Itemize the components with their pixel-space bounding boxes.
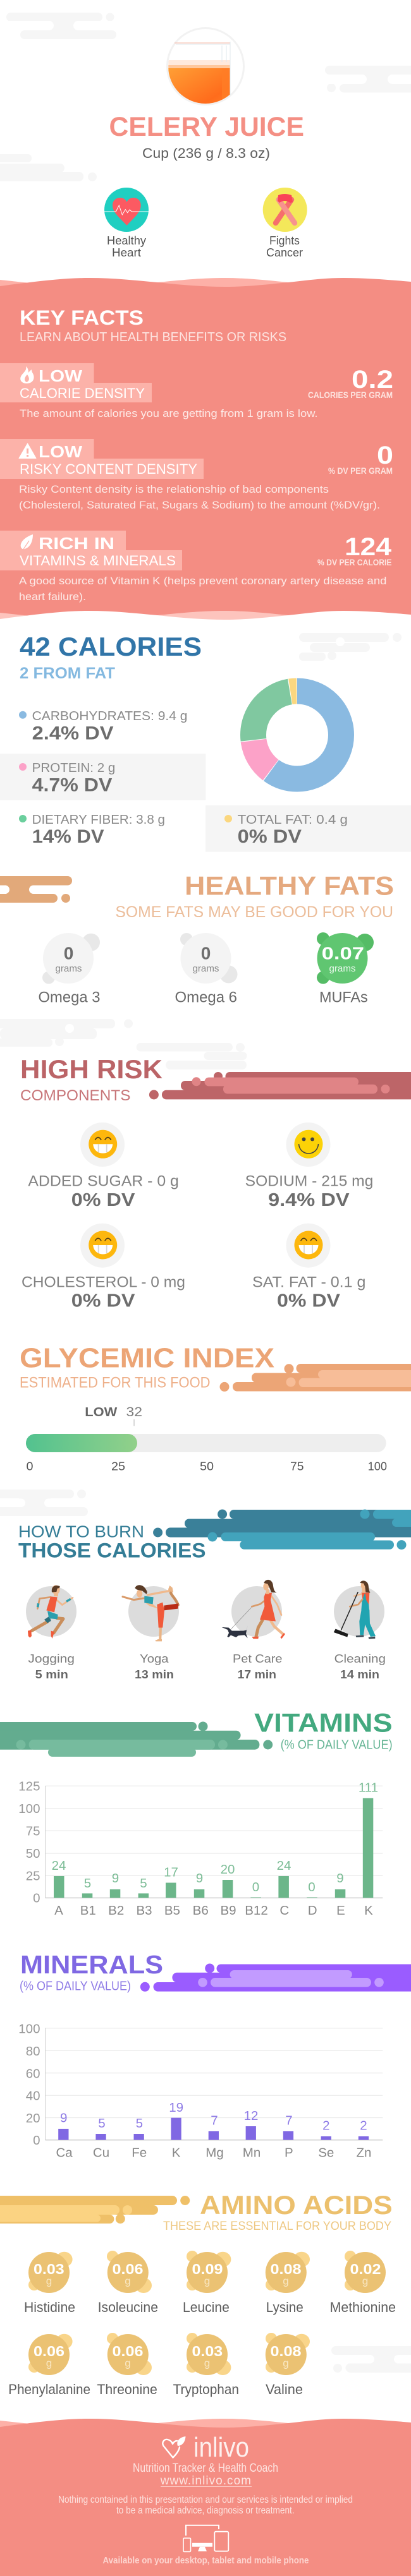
availability note: Available on your desktop, tablet and mobile phone	[102, 2555, 309, 2566]
disclaimer: Nothing contained in this presentation and our services is intended or implied	[58, 2495, 353, 2505]
chart: vitamins bar chart: 9	[336, 1871, 344, 1886]
amino: threonine: 0.06	[113, 2343, 143, 2359]
amino: tryptophan	[173, 2333, 239, 2397]
subheading: components: COMPONENTS	[20, 1087, 130, 1104]
activity: yoga	[123, 1585, 179, 1681]
chart: minerals bar chart: 12	[244, 2109, 258, 2123]
chart: vitamins bar chart: 5	[140, 1876, 147, 1891]
fact: risky content density: % DV PER GRAM	[328, 466, 393, 476]
chart: vitamins bar chart: 24	[52, 1858, 66, 1873]
chart: vitamins bar chart: 5	[84, 1876, 91, 1891]
fact: risky content density: Risky Content density is the relationship of bad components	[19, 483, 329, 495]
heading: those calories: THOSE CALORIES	[18, 1539, 206, 1562]
chart: minerals bar chart: Fe	[132, 2146, 147, 2160]
chart: vitamins bar chart: 0	[252, 1880, 259, 1894]
amino: lysine: Lysine	[266, 2299, 304, 2315]
amino: valine	[266, 2333, 310, 2397]
banner: healthy fats	[0, 876, 80, 903]
chart: vitamins bar chart: 0	[308, 1880, 316, 1894]
chart: vitamins bar chart: 9	[196, 1871, 203, 1886]
fact: calorie density: CALORIES PER GRAM	[308, 390, 393, 400]
activity: yoga: 13 min	[135, 1668, 174, 1681]
chart: vitamins bar chart: 17	[164, 1865, 178, 1880]
fact: risky content density	[0, 439, 393, 511]
amino: tryptophan: 0.03	[192, 2343, 223, 2359]
subheading: key facts: LEARN ABOUT HEALTH BENEFITS OR RISKS	[20, 330, 286, 344]
heading: calories: 42 CALORIES	[20, 632, 202, 661]
legend: dietary fiber: DIETARY FIBER: 3.8 g	[32, 813, 165, 827]
amino: lysine	[266, 2252, 310, 2315]
chart: minerals bar chart: 7	[211, 2114, 218, 2128]
chart: minerals bar chart: 19	[169, 2100, 183, 2115]
amino: phenylalanine	[8, 2334, 90, 2397]
heading: vitamins: VITAMINS	[254, 1708, 393, 1738]
amino: leucine: 0.09	[192, 2261, 223, 2277]
icon: inlivo logo: inlivo	[193, 2432, 249, 2463]
chart: glycemic index gauge: 100	[368, 1460, 387, 1473]
panel: footer	[0, 2419, 411, 2576]
chart: vitamins bar chart: 24	[277, 1858, 291, 1873]
risk: added sugar: 0% DV	[71, 1190, 135, 1210]
amino: valine: 0.08	[271, 2343, 302, 2359]
activity: pet care	[222, 1580, 285, 1681]
amino: tryptophan: g	[204, 2357, 210, 2369]
amino: threonine: g	[125, 2357, 131, 2369]
icon: devices	[183, 2525, 228, 2552]
subheading: from fat: 2 FROM FAT	[20, 665, 115, 682]
chart: vitamins bar chart: 25	[26, 1869, 40, 1883]
chart: vitamins bar chart: 0	[33, 1891, 40, 1905]
heading: key facts: KEY FACTS	[20, 306, 144, 329]
background cloud calories	[299, 633, 402, 661]
chart: minerals bar chart: 2	[322, 2119, 330, 2133]
fat: omega 6	[175, 933, 238, 1006]
subheading: healthy fats: SOME FATS MAY BE GOOD FOR YOU	[115, 903, 393, 921]
subheading: glycemic index: ESTIMATED FOR THIS FOOD	[20, 1375, 210, 1392]
subheading: minerals: (% OF DAILY VALUE)	[20, 1980, 131, 1994]
legend: carbohydrates	[19, 709, 187, 743]
website link: www.inlivo.com	[160, 2474, 251, 2488]
fat: MUFAs	[317, 932, 374, 1006]
amino: leucine: Leucine	[183, 2299, 230, 2315]
chart: minerals bar chart: 2	[360, 2119, 367, 2133]
chart: minerals bar chart: P	[285, 2146, 293, 2160]
disclaimer: to be a medical advice, diagnosis or treatment.	[116, 2505, 295, 2516]
heading: amino acids: AMINO ACIDS	[200, 2190, 393, 2220]
amino: threonine	[97, 2333, 157, 2397]
chart: minerals bar chart: 0	[33, 2133, 40, 2148]
fat: MUFAs: grams	[329, 963, 355, 974]
legend: protein	[0, 754, 206, 800]
fact: risky content density: LOW	[39, 442, 83, 461]
risk: cholesterol	[21, 1224, 185, 1311]
chart: vitamins bar chart: 20	[221, 1862, 235, 1877]
benefit: healthy heart: Healthy	[107, 234, 146, 247]
heading: glycemic index: GLYCEMIC INDEX	[20, 1343, 274, 1374]
chart: glycemic index gauge: 25	[111, 1460, 125, 1473]
fat: omega 3: 0	[64, 944, 73, 963]
background cloud high risk	[137, 1043, 247, 1069]
amino: histidine: Histidine	[24, 2299, 75, 2315]
title: CELERY JUICE	[109, 112, 304, 142]
chart: vitamins bar chart	[18, 1779, 383, 1918]
background cloud below fats	[0, 1019, 133, 1047]
legend: carbohydrates: 2.4% DV	[32, 723, 114, 743]
fact: calorie density	[0, 363, 393, 419]
chart: glycemic index gauge: 32	[126, 1405, 142, 1419]
amino: isoleucine: 0.06	[113, 2261, 143, 2277]
banner: minerals	[140, 1963, 411, 1992]
chart: minerals bar chart: 5	[98, 2116, 106, 2131]
fact: rich in vitamins and minerals: RICH IN	[39, 534, 114, 553]
chart: vitamins bar chart: E	[336, 1903, 345, 1918]
fat: omega 3	[38, 933, 100, 1006]
activity: cleaning	[334, 1580, 386, 1681]
chart: minerals bar chart: 5	[136, 2116, 143, 2131]
fat: omega 6: 0	[201, 944, 211, 963]
activity: jogging: Jogging	[28, 1652, 75, 1665]
chart: vitamins bar chart: K	[364, 1903, 373, 1918]
risk: saturated fat	[252, 1224, 365, 1311]
activity: cleaning: 14 min	[340, 1668, 379, 1681]
tagline: Nutrition Tracker & Health Coach	[133, 2462, 278, 2475]
benefit: fights cancer: Cancer	[266, 246, 303, 259]
chart: vitamins bar chart: 9	[112, 1871, 119, 1886]
activity: pet care: 17 min	[238, 1668, 276, 1681]
fact: rich in vitamins and minerals: A good source of Vitamin K (helps prevent coronary artery disease and	[19, 575, 387, 587]
amino: isoleucine: g	[125, 2275, 131, 2287]
chart: macronutrient donut	[253, 691, 341, 779]
fact: rich in vitamins and minerals: % DV PER CALORIE	[317, 558, 392, 567]
risk: cholesterol: CHOLESTEROL - 0 mg	[21, 1273, 185, 1291]
chart: vitamins bar chart: B3	[136, 1903, 152, 1918]
amino: threonine: Threonine	[97, 2381, 157, 2397]
serving size: Cup (236 g / 8.3 oz)	[142, 145, 270, 161]
chart: vitamins bar chart: 75	[26, 1824, 40, 1838]
fact: calorie density: 0.2	[352, 366, 393, 394]
activity: pet care: Pet Care	[233, 1652, 282, 1665]
disclaimer	[58, 2495, 353, 2516]
chart: vitamins bar chart: 50	[26, 1846, 40, 1861]
chart: vitamins bar chart: B5	[164, 1903, 180, 1918]
chart: minerals bar chart: 60	[26, 2066, 40, 2081]
activity: jogging: 5 min	[35, 1668, 68, 1681]
fact: risky content density: (Cholesterol, Saturated Fat, Sugars & Sodium) to the amount (%DV/gr).	[19, 499, 380, 511]
chart: vitamins bar chart: B6	[193, 1903, 209, 1918]
background cloud top left	[0, 13, 137, 39]
panel: key facts	[0, 278, 411, 629]
benefit: fights cancer	[263, 188, 307, 259]
chart: vitamins bar chart: D	[308, 1903, 317, 1918]
chart: minerals bar chart: Cu	[93, 2146, 109, 2160]
legend: carbohydrates: CARBOHYDRATES: 9.4 g	[32, 709, 187, 723]
chart: glycemic index gauge: 0	[27, 1460, 33, 1473]
fat: omega 3: Omega 3	[38, 989, 100, 1006]
fact: calorie density: LOW	[39, 366, 83, 385]
fat: MUFAs: MUFAs	[319, 989, 368, 1006]
chart: glycemic index gauge: 50	[200, 1460, 214, 1473]
chart: vitamins bar chart: 111	[359, 1781, 378, 1795]
amino: lysine: g	[283, 2275, 289, 2287]
subheading: vitamins: (% OF DAILY VALUE)	[281, 1738, 393, 1752]
legend: protein: PROTEIN: 2 g	[32, 761, 115, 775]
fact: calorie density: CALORIE DENSITY	[20, 385, 145, 401]
banner: high risk	[149, 1072, 411, 1099]
amino: histidine: g	[46, 2275, 52, 2287]
icon: juice glass	[167, 28, 244, 106]
chart: minerals bar chart	[18, 2021, 383, 2160]
chart: minerals bar chart: Mg	[206, 2146, 224, 2160]
background cloud top right	[316, 66, 411, 92]
amino: tryptophan: Tryptophan	[173, 2381, 239, 2397]
chart: vitamins bar chart: B2	[108, 1903, 124, 1918]
benefit: healthy heart: Heart	[112, 246, 141, 259]
risk: cholesterol: 0% DV	[71, 1291, 135, 1311]
chart: minerals bar chart: K	[172, 2146, 181, 2160]
subheading: amino acids: THESE ARE ESSENTIAL FOR YOUR BODY	[163, 2219, 391, 2233]
fact: rich in vitamins and minerals: 124	[345, 533, 392, 561]
fact: rich in vitamins and minerals	[0, 531, 392, 603]
fact: calorie density: The amount of calories you are getting from 1 gram is low.	[20, 407, 318, 419]
risk: added sugar	[28, 1122, 179, 1210]
chart: vitamins bar chart: 100	[18, 1802, 40, 1816]
heading: high risk: HIGH RISK	[20, 1054, 163, 1084]
amino: leucine	[183, 2251, 231, 2315]
risk: saturated fat: SAT. FAT - 0.1 g	[252, 1273, 365, 1291]
fact: rich in vitamins and minerals: VITAMINS & MINERALS	[20, 553, 176, 569]
chart: glycemic index gauge: LOW	[85, 1405, 117, 1419]
chart: minerals bar chart: Se	[318, 2146, 334, 2160]
risk: saturated fat: 0% DV	[277, 1291, 341, 1311]
amino: histidine	[24, 2252, 75, 2315]
risk: sodium	[245, 1122, 373, 1210]
chart: minerals bar chart: Zn	[357, 2146, 371, 2160]
amino: isoleucine: Isoleucine	[98, 2299, 158, 2315]
background cloud left	[0, 154, 97, 181]
chart: minerals bar chart: 100	[18, 2021, 40, 2036]
chart: glycemic index gauge	[26, 1405, 387, 1473]
icon: inlivo logo	[163, 2432, 249, 2463]
heading: healthy fats: HEALTHY FATS	[185, 871, 394, 901]
legend: protein: 4.7% DV	[32, 774, 112, 795]
banner: glycemic index	[220, 1364, 411, 1392]
benefit: healthy heart	[104, 188, 149, 259]
chart: vitamins bar chart: B12	[245, 1903, 268, 1918]
amino: valine: Valine	[266, 2381, 303, 2397]
activity: cleaning: Cleaning	[334, 1652, 386, 1665]
amino: methionine: g	[362, 2275, 368, 2287]
legend: total fat	[206, 805, 411, 852]
banner: amino acids	[0, 2196, 190, 2224]
amino: lysine: 0.08	[271, 2261, 302, 2277]
legend: dietary fiber: 14% DV	[32, 826, 104, 847]
amino: leucine: g	[204, 2275, 210, 2287]
chart: minerals bar chart: 40	[26, 2089, 40, 2104]
activity: yoga: Yoga	[140, 1652, 169, 1665]
chart: minerals bar chart: 80	[26, 2044, 40, 2059]
amino: valine: g	[283, 2357, 289, 2369]
banner: burn	[153, 1510, 411, 1550]
fat: omega 3: grams	[56, 963, 82, 974]
amino: methionine: Methionine	[330, 2299, 396, 2315]
fat: omega 6: grams	[192, 963, 219, 974]
fact: risky content density: 0	[377, 442, 393, 469]
legend: dietary fiber	[19, 813, 165, 847]
chart: vitamins bar chart: 125	[18, 1779, 40, 1793]
fat: MUFAs: 0.07	[322, 944, 364, 963]
background cloud burn	[0, 1490, 101, 1516]
chart: minerals bar chart: Ca	[56, 2146, 73, 2160]
amino: phenylalanine: 0.06	[34, 2343, 64, 2359]
chart: vitamins bar chart: A	[54, 1903, 63, 1918]
banner: vitamins	[0, 1722, 273, 1757]
chart: vitamins bar chart: B9	[220, 1903, 236, 1918]
chart: minerals bar chart: 7	[285, 2114, 293, 2128]
risk: sodium: 9.4% DV	[268, 1190, 350, 1210]
chart: minerals bar chart: 9	[60, 2111, 67, 2126]
amino: phenylalanine: g	[46, 2357, 52, 2369]
amino: phenylalanine: Phenylalanine	[8, 2381, 90, 2397]
risk: sodium: SODIUM - 215 mg	[245, 1172, 373, 1190]
heading: how to burn: HOW TO BURN	[18, 1522, 144, 1541]
amino: methionine	[330, 2251, 396, 2315]
amino: methionine: 0.02	[350, 2261, 381, 2277]
legend: total fat: TOTAL FAT: 0.4 g	[238, 813, 348, 827]
background cloud amino	[316, 2346, 411, 2373]
chart: vitamins bar chart: C	[279, 1903, 289, 1918]
heading: minerals: MINERALS	[20, 1950, 163, 1979]
chart: minerals bar chart: 20	[26, 2111, 40, 2126]
amino: isoleucine	[98, 2251, 158, 2315]
chart: glycemic index gauge: 75	[290, 1460, 304, 1473]
risk: added sugar: ADDED SUGAR - 0 g	[28, 1172, 179, 1190]
legend: total fat: 0% DV	[238, 826, 302, 847]
chart: vitamins bar chart: B1	[80, 1903, 96, 1918]
benefit: fights cancer: Fights	[269, 234, 300, 247]
fat: omega 6: Omega 6	[175, 989, 237, 1006]
fact: rich in vitamins and minerals: heart failure).	[19, 591, 86, 603]
amino: histidine: 0.03	[34, 2261, 64, 2277]
chart: minerals bar chart: Mn	[243, 2146, 261, 2160]
fact: risky content density: RISKY CONTENT DENSITY	[20, 461, 197, 477]
activity: jogging	[26, 1585, 77, 1681]
